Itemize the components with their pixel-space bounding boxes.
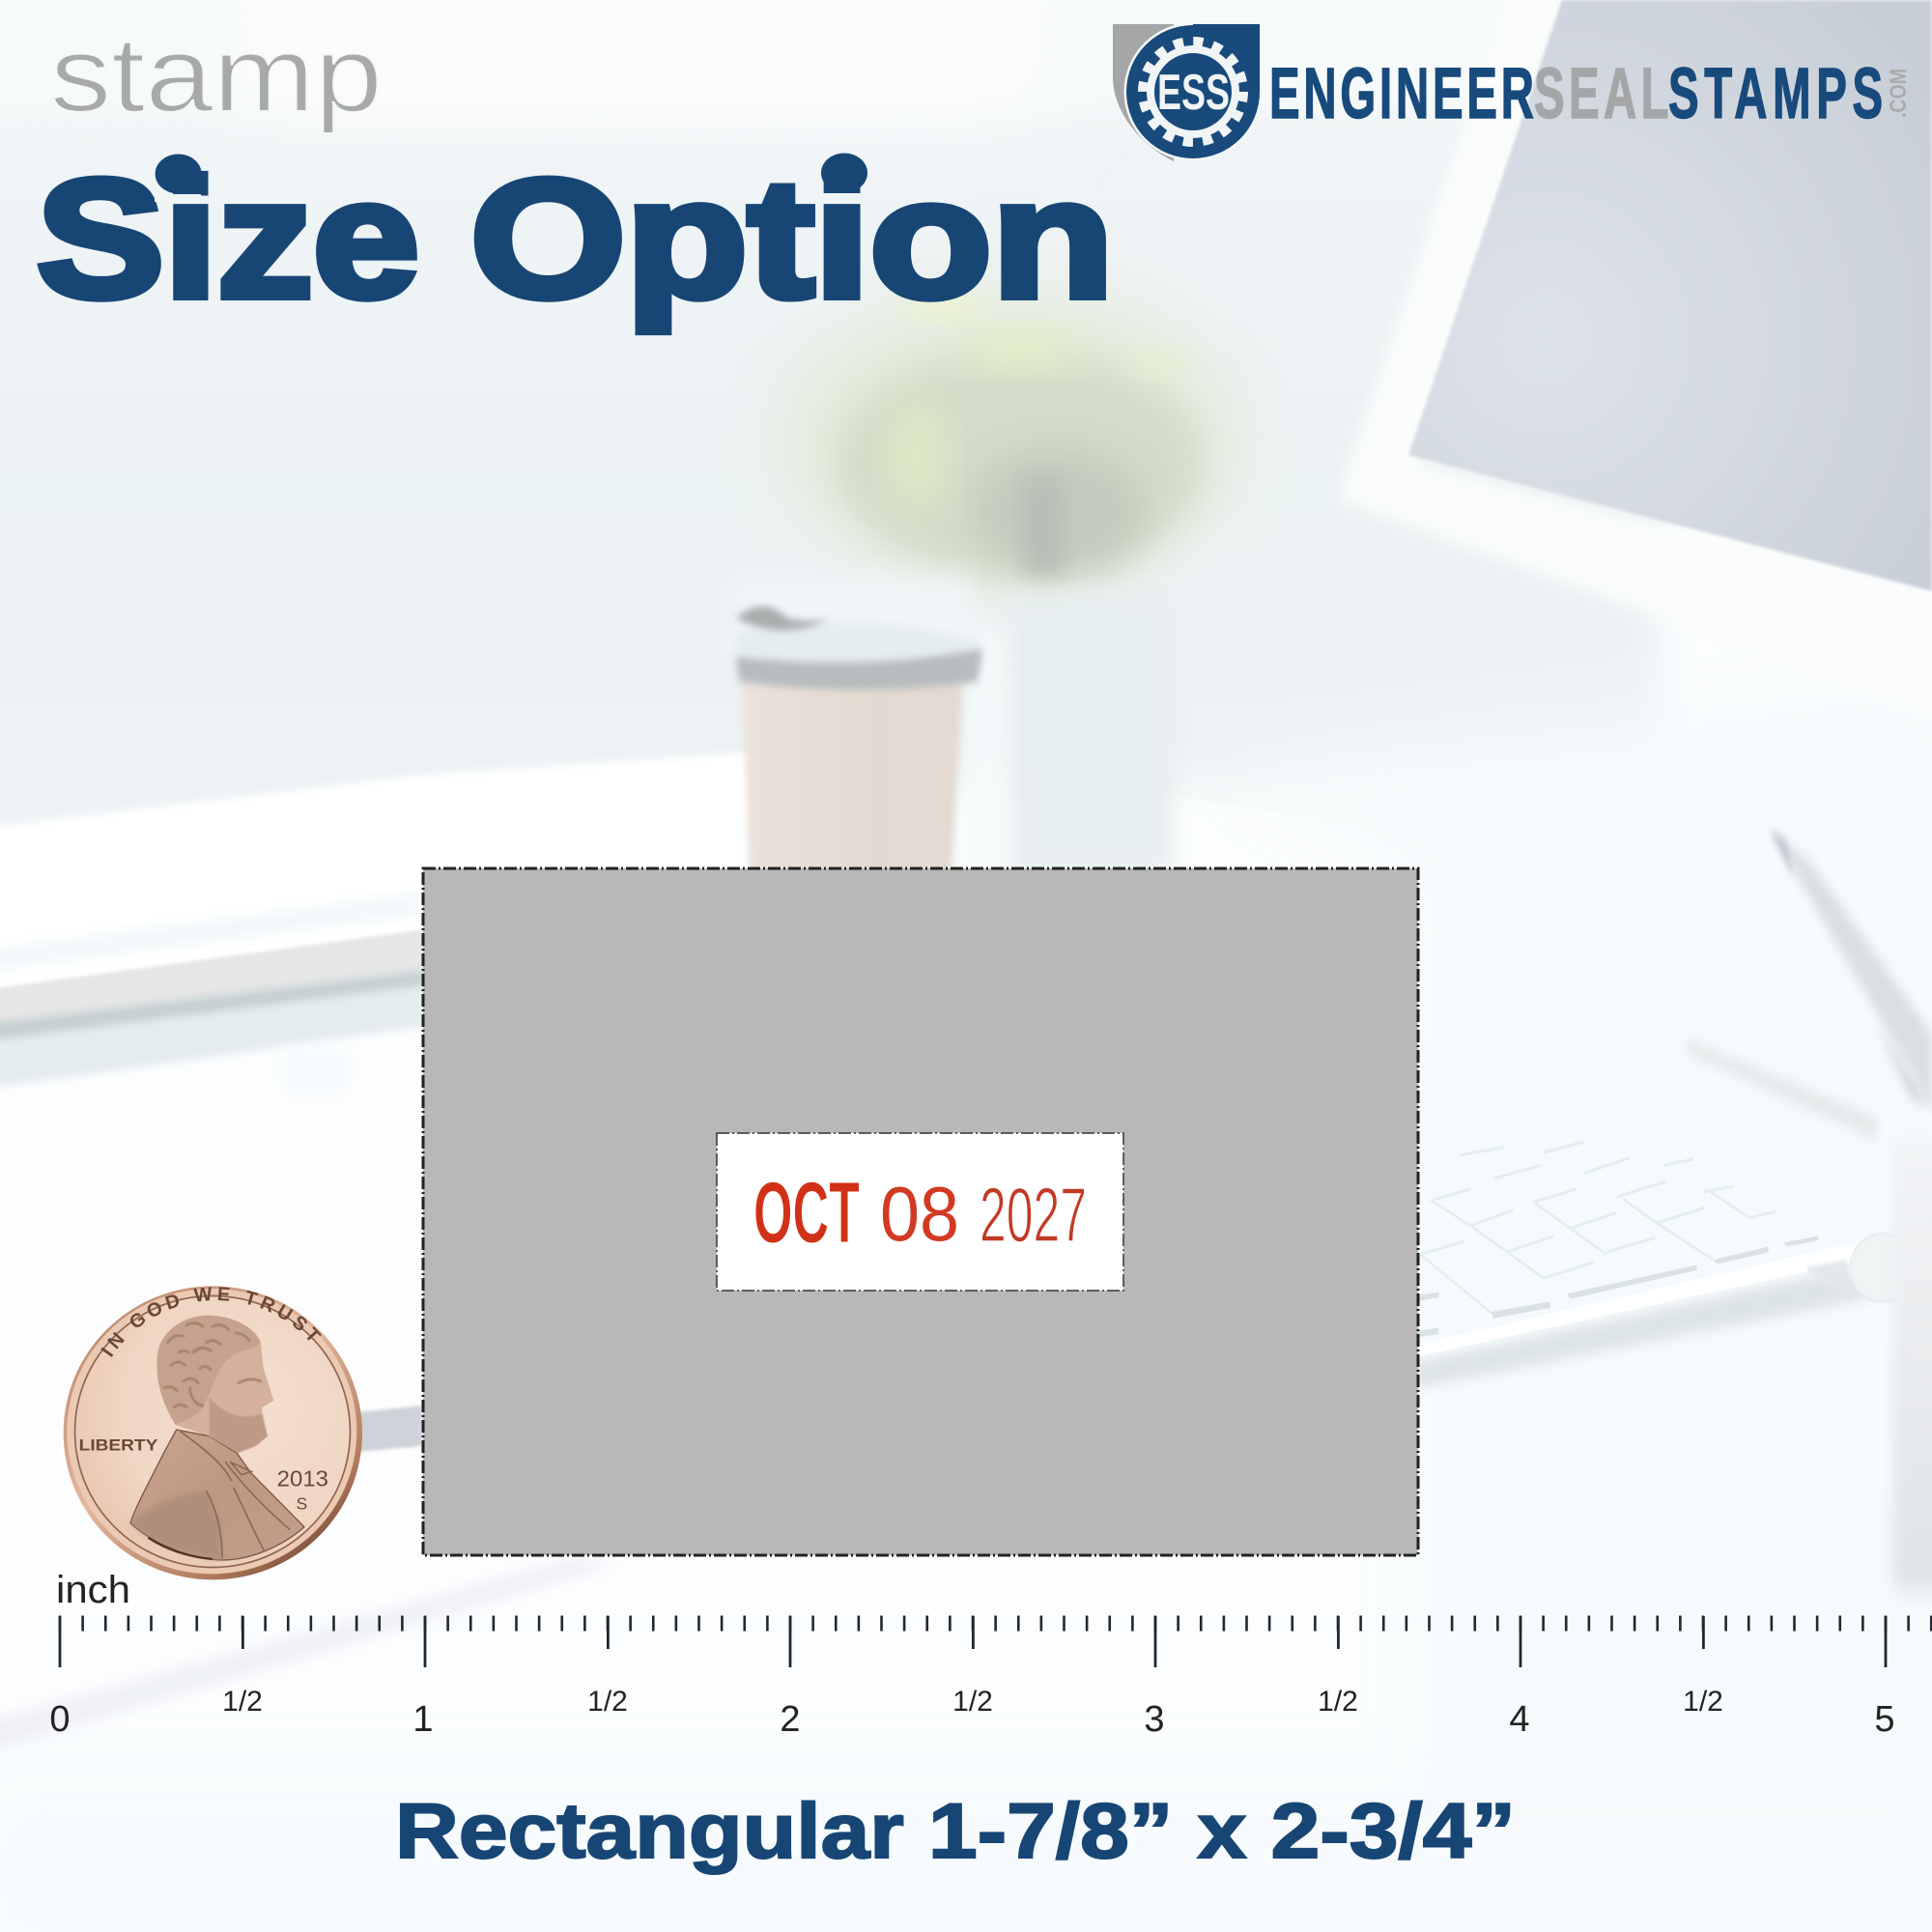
coin lettering: LIBERTY <box>79 1436 157 1455</box>
plant pot <box>1007 594 1173 874</box>
head <box>156 1316 273 1453</box>
inch numbers: 5 <box>1874 1699 1895 1740</box>
inch numbers <box>49 1699 1895 1740</box>
coin lettering <box>79 1287 328 1514</box>
coin lettering: 2013 <box>277 1466 328 1492</box>
unit label: inch <box>56 1569 130 1611</box>
date: 08: 08 <box>880 1171 959 1257</box>
coffee cup <box>734 580 982 874</box>
left desk paper and book <box>0 753 744 1005</box>
inch numbers: 0 <box>49 1699 71 1740</box>
logo wordmark <box>1269 54 1912 134</box>
penny coin <box>64 1286 362 1580</box>
stamp body outline <box>423 868 1418 1555</box>
ruler ticks <box>59 1623 1932 1642</box>
half-inch labels: 1/2 <box>587 1686 628 1718</box>
half-inch labels: 1/2 <box>222 1686 263 1718</box>
logo emblem <box>1113 24 1260 161</box>
strip behind coin <box>357 1406 422 1452</box>
hair <box>156 1316 261 1425</box>
impression area with date <box>717 1133 1123 1291</box>
wall <box>0 0 1642 869</box>
logo: Engineer Seal Stamps <box>1113 24 1912 161</box>
inch numbers: 4 <box>1509 1699 1530 1740</box>
logo emblem: ESS <box>1157 65 1230 121</box>
coat lines <box>181 1432 290 1558</box>
monitor bezel <box>1337 0 1932 724</box>
title: Size Option: Option <box>470 144 1114 332</box>
size caption: Rectangular 1-7/8” x 2-3/4” <box>395 1788 1516 1875</box>
keyboard, pens and jar <box>1410 831 1932 1590</box>
coin lettering: IN GOD WE TRUST <box>100 1287 322 1357</box>
bust <box>130 1430 304 1560</box>
subtitle: stamp: stamp <box>50 15 383 134</box>
logo wordmark: SEAL <box>1534 54 1669 134</box>
logo wordmark: .COM <box>1886 69 1912 118</box>
date: 2027: 2027 <box>980 1172 1087 1258</box>
title: Size Option <box>37 144 1114 332</box>
logo wordmark: STAMPS <box>1668 54 1883 134</box>
pencil <box>1770 831 1932 1108</box>
date: OCT: OCT <box>753 1165 860 1262</box>
half-inch labels: 1/2 <box>1318 1686 1358 1718</box>
inch numbers: 2 <box>780 1699 801 1740</box>
keyboard key bars <box>1410 1236 1818 1338</box>
logo wordmark: ENGINEER <box>1269 54 1534 134</box>
plant <box>782 290 1236 580</box>
inch numbers: 1 <box>412 1699 434 1740</box>
half-inch labels: 1/2 <box>1683 1686 1723 1718</box>
coin portrait <box>130 1316 304 1560</box>
ruler <box>49 1569 1932 1740</box>
half-inch labels <box>222 1686 1723 1718</box>
half-inch labels: 1/2 <box>952 1686 993 1718</box>
right desk surface <box>1198 676 1932 1932</box>
inch numbers: 3 <box>1144 1699 1165 1740</box>
light streak <box>0 1557 618 1753</box>
coin lettering: S <box>297 1494 307 1514</box>
title: Size Option: Size <box>37 144 419 332</box>
